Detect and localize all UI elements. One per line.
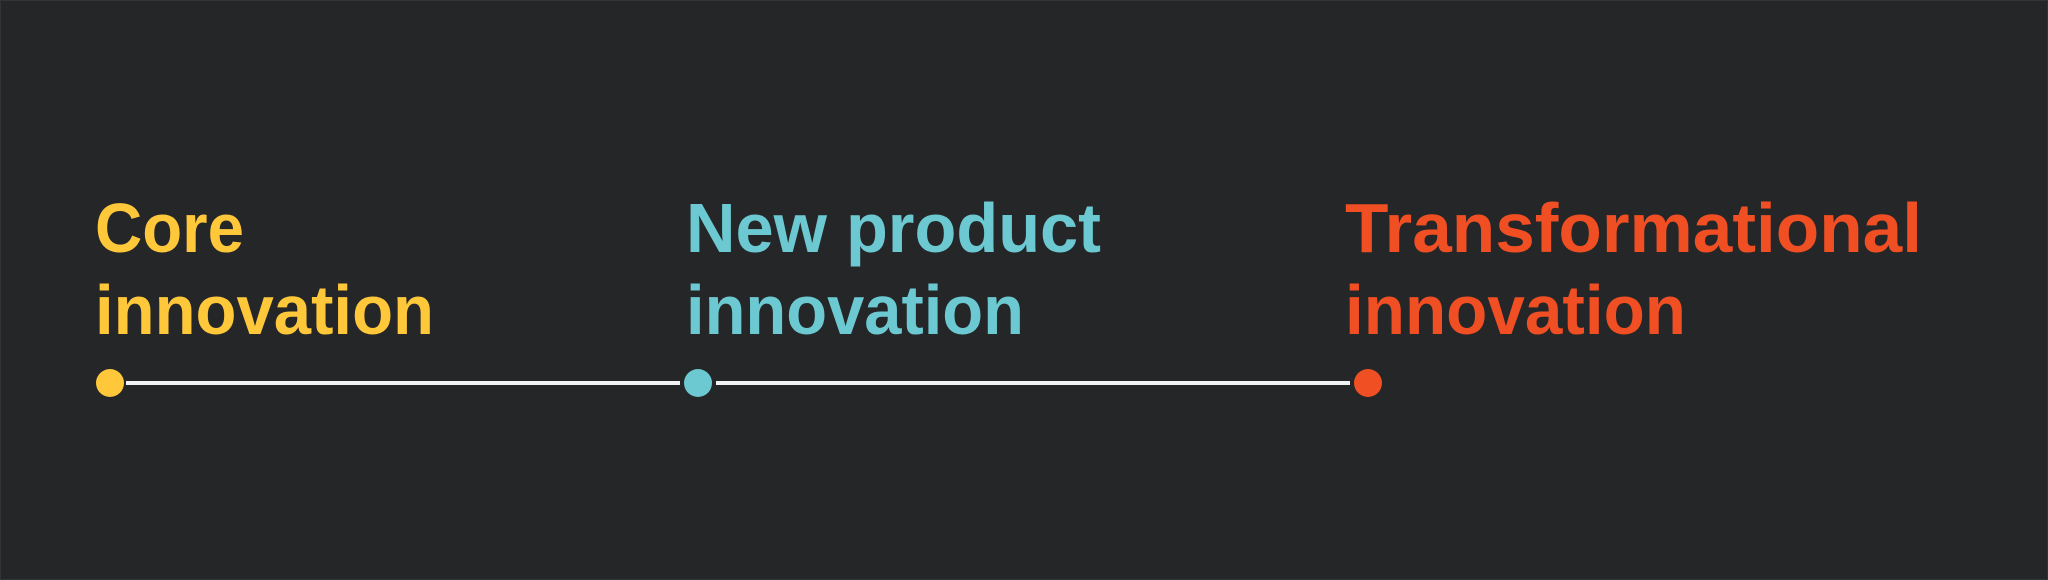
stage: transformational innovation <box>1345 189 1922 397</box>
heading: new product innovation: New product <box>686 189 1101 267</box>
heading: core innovation: Core <box>95 189 244 267</box>
heading: transformational innovation: Transformational <box>1345 189 1922 267</box>
heading: core innovation: innovation <box>95 271 434 349</box>
stage: core innovation <box>95 189 434 397</box>
timeline line 2 <box>716 381 1350 385</box>
heading: transformational innovation: innovation <box>1345 271 1686 349</box>
dot: transformational <box>1354 369 1382 397</box>
timeline line 1 <box>126 381 680 385</box>
dot: new product <box>684 369 712 397</box>
stage: new product innovation <box>684 189 1101 397</box>
heading: new product innovation: innovation <box>686 271 1024 349</box>
dot: core <box>96 369 124 397</box>
